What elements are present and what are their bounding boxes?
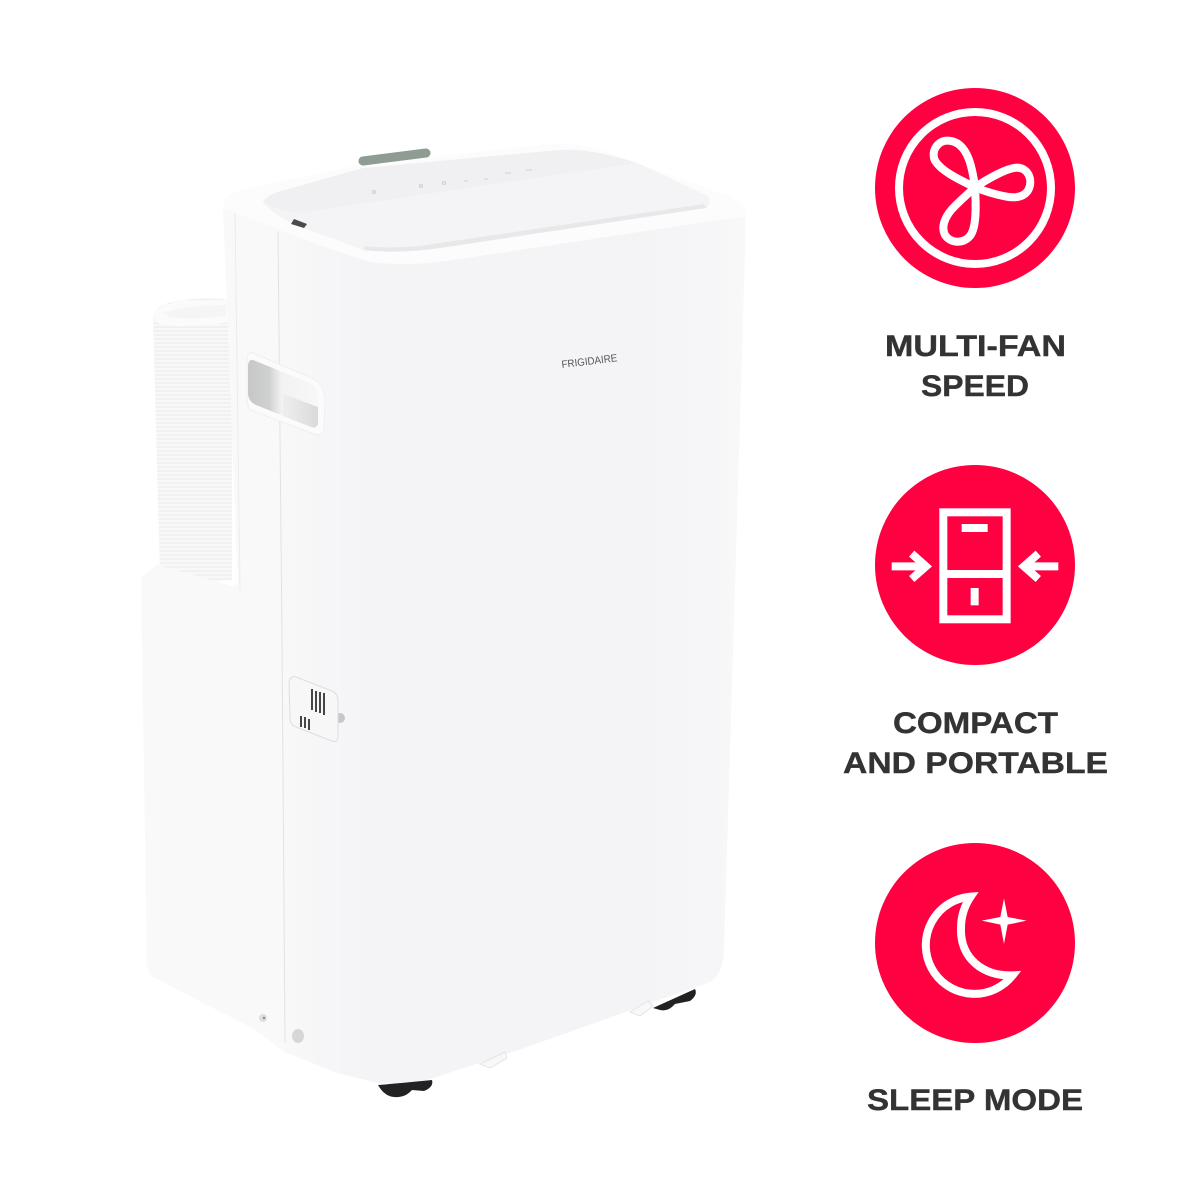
label: compact and portable: COMPACT (893, 707, 1058, 740)
side panel (141, 208, 285, 1053)
icon: moon and star (875, 843, 1075, 1043)
brand logo: FRIGIDAIRE (561, 352, 618, 371)
label: multi-fan speed (885, 330, 1066, 403)
side panel seam lines (235, 210, 285, 1043)
base feet (480, 1001, 653, 1068)
feature: sleep mode (867, 843, 1083, 1117)
feature: compact and portable (843, 465, 1108, 780)
label: multi-fan speed: SPEED (921, 370, 1029, 403)
rear vent (289, 677, 345, 741)
label: compact and portable (843, 707, 1108, 780)
icon: fan (875, 88, 1075, 288)
lid upper panel (263, 150, 637, 213)
unit body silhouette (141, 144, 746, 1084)
black tab (291, 219, 307, 228)
feature: multi-fan speed (875, 88, 1075, 403)
control lid (263, 150, 710, 252)
label: sleep mode: SLEEP MODE (867, 1084, 1083, 1117)
control panel buttons (372, 170, 532, 194)
icon: compact unit with arrows (875, 465, 1075, 665)
lid groove (364, 204, 706, 252)
label: compact and portable: AND PORTABLE (843, 747, 1108, 780)
grey handle bar (363, 153, 426, 161)
wheels (378, 989, 696, 1097)
product: portable air conditioner (141, 144, 746, 1097)
exhaust hose (153, 299, 232, 581)
side carry handle (247, 353, 325, 435)
drain plugs (259, 1014, 304, 1043)
top rim (223, 144, 746, 264)
label: multi-fan speed: MULTI-FAN (885, 330, 1066, 363)
